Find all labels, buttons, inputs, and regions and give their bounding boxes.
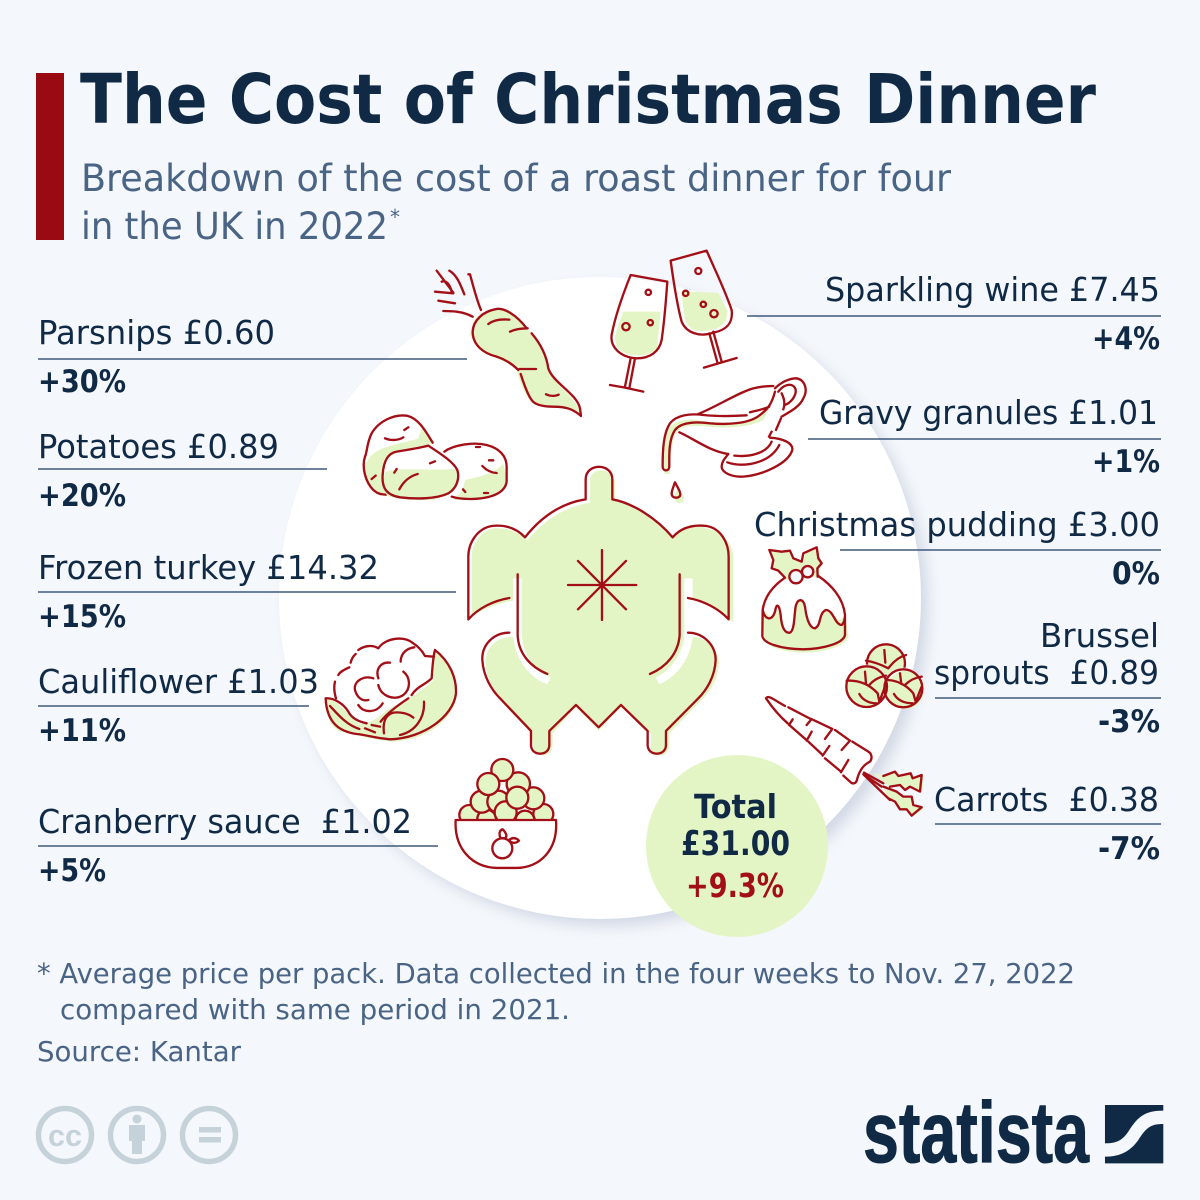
- icon: creative commons licence badges: cc: [48, 1118, 82, 1153]
- icon: gravy boat: [663, 378, 806, 503]
- label: potatoes: Potatoes £0.89: [38, 428, 279, 466]
- label: parsnips: Parsnips £0.60: [38, 314, 275, 352]
- label: cauliflower: [38, 663, 319, 749]
- label: sparkling wine: [747, 271, 1161, 357]
- label: carrots: Carrots £0.38: [934, 781, 1159, 819]
- icon: potatoes: [364, 415, 507, 500]
- icon: sparkling wine glasses: [610, 251, 737, 392]
- subtitle: *: [390, 205, 400, 229]
- label: parsnips: [38, 314, 467, 400]
- icon: parsnip: [435, 271, 581, 416]
- icon: brussels sprouts: [845, 644, 924, 709]
- icon: cranberry bowl: [456, 759, 556, 868]
- icon: christmas pudding: [762, 547, 849, 653]
- label: cauliflower: Cauliflower £1.03: [38, 663, 319, 701]
- label: gravy granules: [808, 394, 1161, 480]
- icon: creative commons licence badges: [38, 1108, 236, 1162]
- total callout: +9.3%: [686, 866, 784, 905]
- label: cranberry sauce: [38, 803, 438, 889]
- footnote: * Average price per pack. Data collected in the four weeks to Nov. 27, 2022: [37, 958, 1075, 990]
- total callout: Total: [694, 787, 777, 826]
- statista logo mark: [1105, 1105, 1163, 1163]
- label: frozen turkey: Frozen turkey £14.32: [38, 549, 379, 587]
- label: brussel sprouts: Brussel: [1040, 617, 1159, 655]
- label: carrots: -7%: [1098, 831, 1160, 867]
- subtitle: in the UK in 2022: [81, 205, 388, 248]
- total callout: £31.00: [681, 824, 790, 864]
- label: sparkling wine: +4%: [1092, 321, 1160, 357]
- label: christmas pudding: 0%: [1112, 556, 1160, 592]
- icon: turkey: [468, 467, 733, 756]
- label: cauliflower: +11%: [38, 713, 126, 749]
- footnote: [37, 958, 1075, 1026]
- total callout: [646, 755, 828, 937]
- label: potatoes: [38, 428, 327, 514]
- icon: cauliflower: [326, 639, 457, 742]
- label: sparkling wine: Sparkling wine £7.45: [825, 271, 1160, 309]
- label: christmas pudding: Christmas pudding £3.00: [754, 506, 1160, 544]
- label: cranberry sauce: +5%: [38, 853, 106, 889]
- label: potatoes: +20%: [38, 478, 126, 514]
- footnote: compared with same period in 2021.: [60, 994, 570, 1026]
- label: christmas pudding: [754, 506, 1161, 592]
- icon: carrot: [766, 697, 924, 817]
- statista wordmark: statista: [863, 1085, 1090, 1181]
- label: carrots: [934, 781, 1161, 867]
- title: The Cost of Christmas Dinner: [80, 60, 1096, 140]
- label: gravy granules: Gravy granules £1.01: [819, 394, 1158, 432]
- plate: [279, 277, 928, 926]
- label: brussel sprouts: [934, 617, 1161, 740]
- label: frozen turkey: +15%: [38, 599, 126, 635]
- title accent bar: [36, 73, 64, 240]
- label: brussel sprouts: -3%: [1098, 704, 1160, 740]
- label: parsnips: +30%: [38, 364, 126, 400]
- label: gravy granules: +1%: [1092, 444, 1160, 480]
- label: brussel sprouts: sprouts £0.89: [934, 654, 1159, 692]
- subtitle: Breakdown of the cost of a roast dinner for four: [81, 157, 952, 200]
- label: cranberry sauce: Cranberry sauce £1.02: [38, 803, 412, 841]
- subtitle: [81, 157, 952, 248]
- source: Source: Kantar: [37, 1036, 242, 1068]
- label: frozen turkey: [38, 549, 456, 635]
